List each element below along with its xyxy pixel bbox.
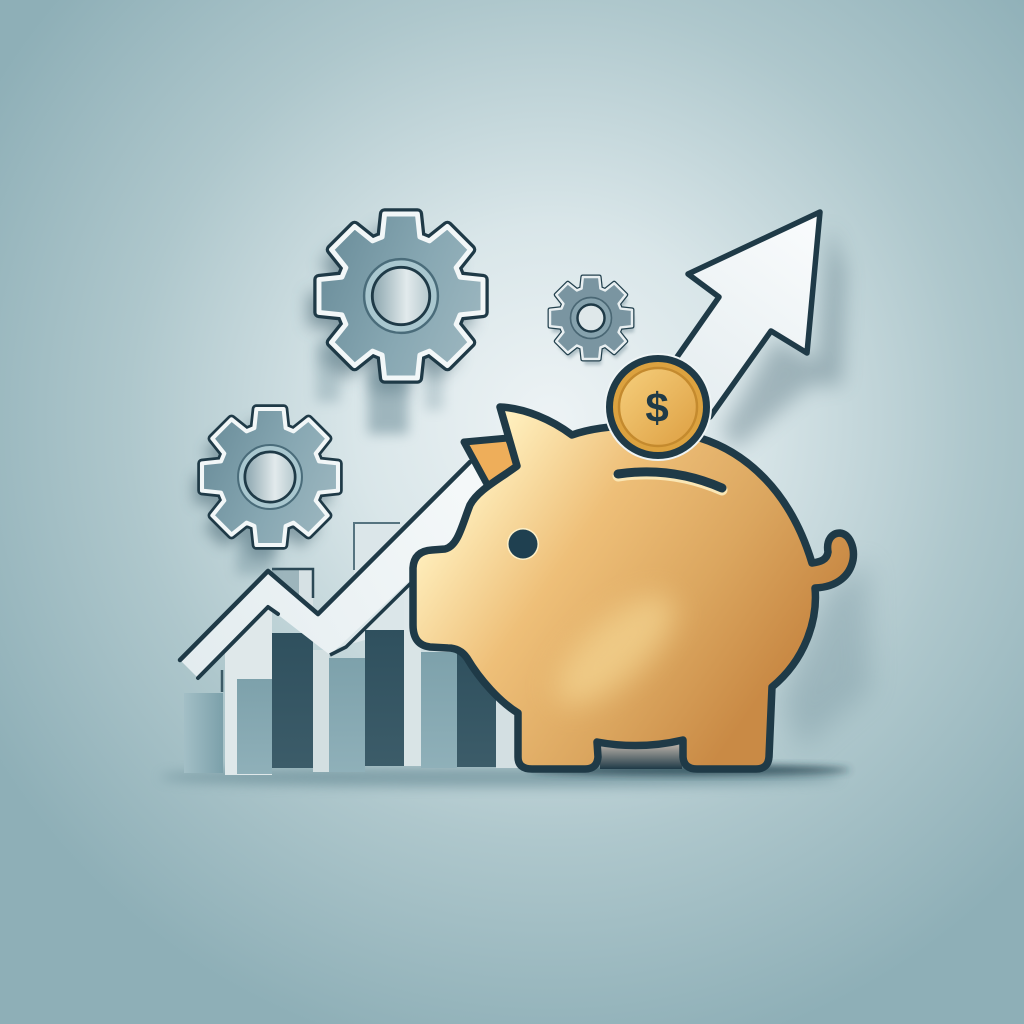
pig body with tail <box>413 407 853 769</box>
icon: dollar coin <box>604 353 712 461</box>
icon: dollar coin: $ <box>645 384 669 431</box>
ground shadow <box>160 765 850 787</box>
pig body shadow <box>780 560 870 750</box>
icon: piggy bank <box>413 407 853 769</box>
growth arrow: head <box>660 212 820 450</box>
light strip <box>404 630 421 766</box>
bar 3 <box>272 633 313 768</box>
pig leg gap shade <box>600 745 682 769</box>
bar 1 <box>184 670 223 773</box>
ghost bar: tall <box>354 522 404 632</box>
pig slot <box>618 472 722 490</box>
pig body highlight <box>539 578 691 722</box>
ghost bar: short <box>272 569 313 609</box>
bar 7 <box>457 650 496 767</box>
bar 6 <box>421 652 457 768</box>
icon: left gear <box>202 409 338 545</box>
bar chart <box>184 522 520 775</box>
bar 2 with light backing <box>225 607 272 775</box>
pig eye <box>507 528 539 560</box>
growth arrow: lower band <box>180 462 520 678</box>
pig back ear <box>464 438 520 486</box>
bar 5 <box>365 630 404 766</box>
gear shadows <box>194 228 634 575</box>
bar 4 <box>329 658 365 772</box>
light strip <box>496 690 520 768</box>
arrow shadow <box>722 225 845 450</box>
light strip <box>313 650 329 772</box>
icon: large gear <box>319 214 483 378</box>
icon: small gear <box>550 277 632 359</box>
light backdrop behind bars <box>330 575 425 650</box>
